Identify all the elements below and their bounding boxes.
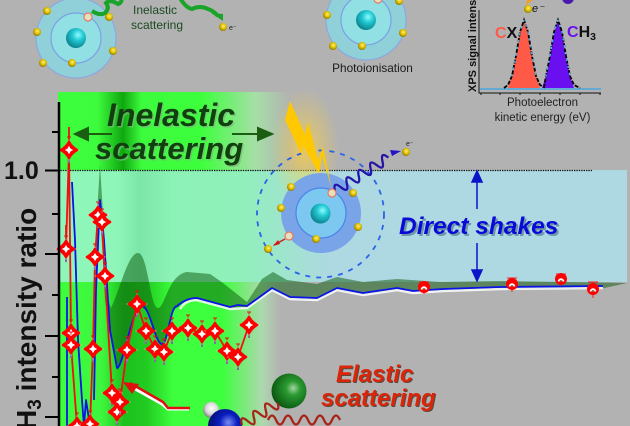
atom: inelastic scattering [33,0,227,78]
label: inelastic scattering [131,3,183,32]
red data markers [55,137,260,426]
chart data dots [512,20,570,76]
label: e- italic: e⁻ [532,3,545,15]
icon: small electron [524,5,532,13]
dotted 1.0 reference line [58,170,592,172]
heading: direct shakes: Direct shakes [399,213,558,240]
chart fill: CX peak [508,20,540,88]
chart label: CH3: CH [567,24,590,41]
arrow: inelastic left [75,128,112,140]
chart x title: Photoelectron [507,97,578,109]
chart axes [479,10,601,95]
icon: small orange bolt [526,0,533,5]
white halo of blue curve [180,288,603,309]
inelastic green arrow head [211,13,223,21]
arrow: direct shakes down [472,243,482,281]
chart fit line [504,20,580,88]
inelastic green wave [92,0,218,16]
y axis title: intensity ratio [11,208,42,399]
heading: elastic scattering: scattering [321,385,436,412]
label: e-: e⁻ [406,141,414,148]
heading: inelastic scattering: Inelastic [108,98,237,134]
heading: elastic scattering: Elastic [337,362,414,389]
atom: photoionisation [323,0,407,60]
heading: inelastic scattering [95,97,245,168]
XPS chart [467,0,601,124]
y axis value 1.0: 1.0 [4,157,39,185]
heading: elastic scattering [321,361,437,413]
elastic waves [239,398,340,426]
blue model curve [67,182,603,426]
label: inelastic scattering: Inelastic [133,3,177,17]
round data markers [418,273,599,298]
dark green uncertainty band [84,165,627,426]
chart x title second line: kinetic energy (eV) [495,112,591,124]
panel: direct shakes region [58,170,627,282]
label: photoionisation: Photoionisation [332,61,413,75]
red data error bar [66,127,69,249]
atom: direct shake atom [257,148,410,278]
arrow: direct shakes up [472,171,482,209]
heading: inelastic scattering: scattering [96,132,245,168]
y axis title: 3 [25,399,46,410]
heading: inelastic scattering: Inelastic [107,97,235,133]
icon: lightning bolt [285,101,332,190]
label: e- small: e⁻ [229,25,237,32]
heading: inelastic scattering: scattering [95,131,243,166]
chart label: CH3: 3 [590,31,596,43]
panel: inelastic scattering region [58,92,290,170]
arrow: red pointer [123,382,190,409]
photoelectron arrow head [390,150,401,156]
heading: elastic scattering: Elastic [336,361,413,388]
arrow: inelastic right [232,128,272,140]
chart fill: CH3 peak [542,20,574,88]
heading: direct shakes: Direct shakes [401,215,560,242]
y axis ticks [45,132,59,417]
photoelectron blue wave [332,153,391,195]
panel: elastic scattering region [58,282,280,426]
chart baseline [480,88,601,90]
y axis [58,102,60,426]
molecule: balls [203,374,306,426]
atom: lightning glow [271,88,339,212]
hole on atom [328,189,336,197]
icon: purple ball [562,0,574,4]
red data line [66,150,249,426]
heading: elastic scattering: scattering [322,386,437,413]
panel: direct shakes green fade [58,170,330,282]
chart label: CX: CX [495,25,518,42]
label: inelastic scattering: scattering [131,18,183,32]
